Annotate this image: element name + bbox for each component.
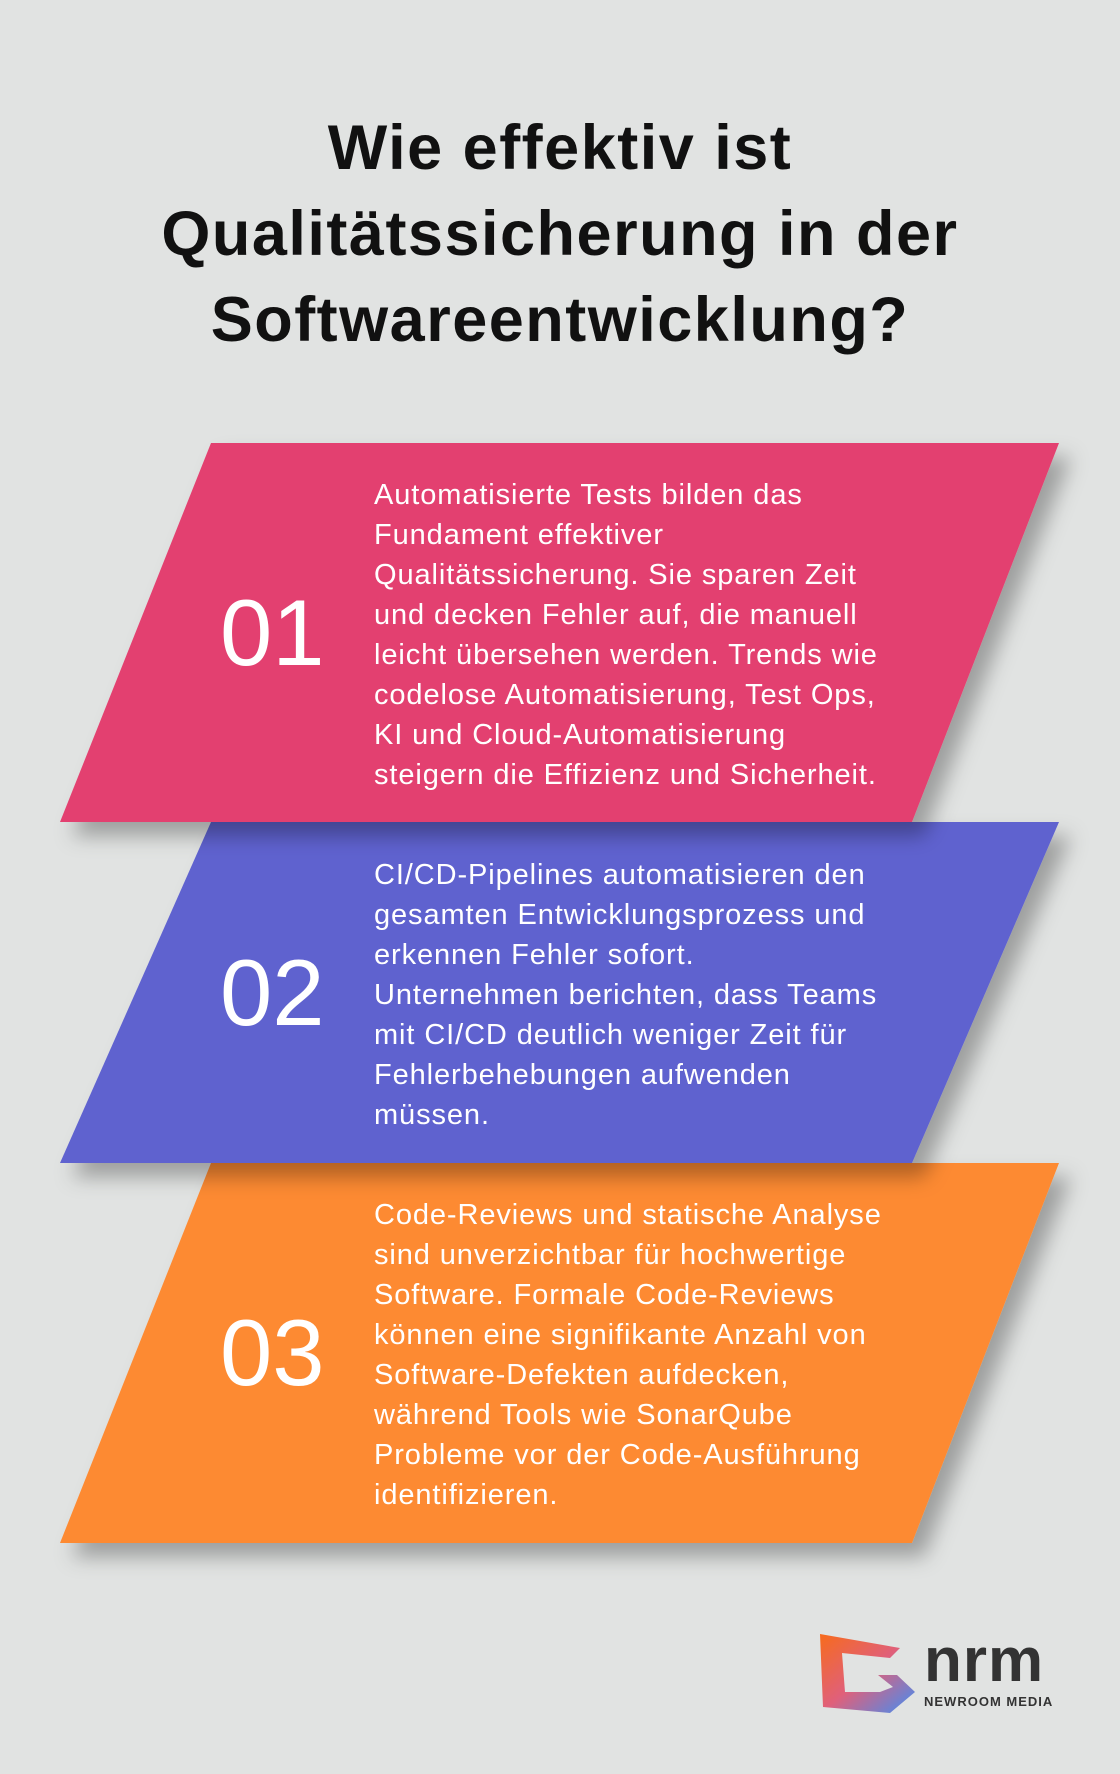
text 02: Unternehmen berichten, dass Teams bbox=[374, 979, 877, 1011]
text 01: leicht übersehen werden. Trends wie bbox=[374, 639, 878, 671]
text 03: Code-Reviews und statische Analyse bbox=[374, 1199, 882, 1231]
text 02: Fehlerbehebungen aufwenden bbox=[374, 1059, 791, 1091]
panel 3 bbox=[60, 1163, 1059, 1543]
text 01: KI und Cloud-Automatisierung bbox=[374, 719, 786, 751]
number 02: 02 bbox=[220, 940, 325, 1045]
text 03: Software. Formale Code-Reviews bbox=[374, 1279, 835, 1311]
text 01: und decken Fehler auf, die manuell bbox=[374, 599, 858, 631]
logo icon bbox=[820, 1634, 915, 1713]
logo text: NEWROOM MEDIA bbox=[924, 1694, 1053, 1709]
text 02: mit CI/CD deutlich weniger Zeit für bbox=[374, 1019, 847, 1051]
text 03: identifizieren. bbox=[374, 1479, 558, 1511]
number 03: 03 bbox=[220, 1300, 325, 1405]
text 02: müssen. bbox=[374, 1099, 490, 1131]
text 02: CI/CD-Pipelines automatisieren den bbox=[374, 859, 866, 891]
title bbox=[161, 113, 959, 355]
title: Qualitätssicherung in der bbox=[161, 199, 959, 269]
text 01 bbox=[374, 479, 878, 791]
text 03: können eine signifikante Anzahl von bbox=[374, 1319, 867, 1351]
text 02 bbox=[374, 859, 877, 1131]
panel 1 bbox=[60, 443, 1059, 822]
number 01: 01 bbox=[220, 580, 325, 685]
panel 2 bbox=[60, 822, 1059, 1163]
text 03: Probleme vor der Code-Ausführung bbox=[374, 1439, 861, 1471]
text 01: Fundament effektiver bbox=[374, 519, 664, 551]
text 01: Qualitätssicherung. Sie sparen Zeit bbox=[374, 559, 857, 591]
title: Wie effektiv ist bbox=[328, 113, 792, 183]
text 03: Software-Defekten aufdecken, bbox=[374, 1359, 789, 1391]
logo text: nrm bbox=[924, 1626, 1044, 1695]
text 02: erkennen Fehler sofort. bbox=[374, 939, 695, 971]
text 01: steigern die Effizienz und Sicherheit. bbox=[374, 759, 877, 791]
text 03: sind unverzichtbar für hochwertige bbox=[374, 1239, 846, 1271]
text 01: codelose Automatisierung, Test Ops, bbox=[374, 679, 876, 711]
text 02: gesamten Entwicklungsprozess und bbox=[374, 899, 865, 931]
title: Softwareentwicklung? bbox=[211, 285, 909, 355]
text 03: während Tools wie SonarQube bbox=[374, 1399, 793, 1431]
text 03 bbox=[374, 1199, 882, 1511]
text 01: Automatisierte Tests bilden das bbox=[374, 479, 803, 511]
